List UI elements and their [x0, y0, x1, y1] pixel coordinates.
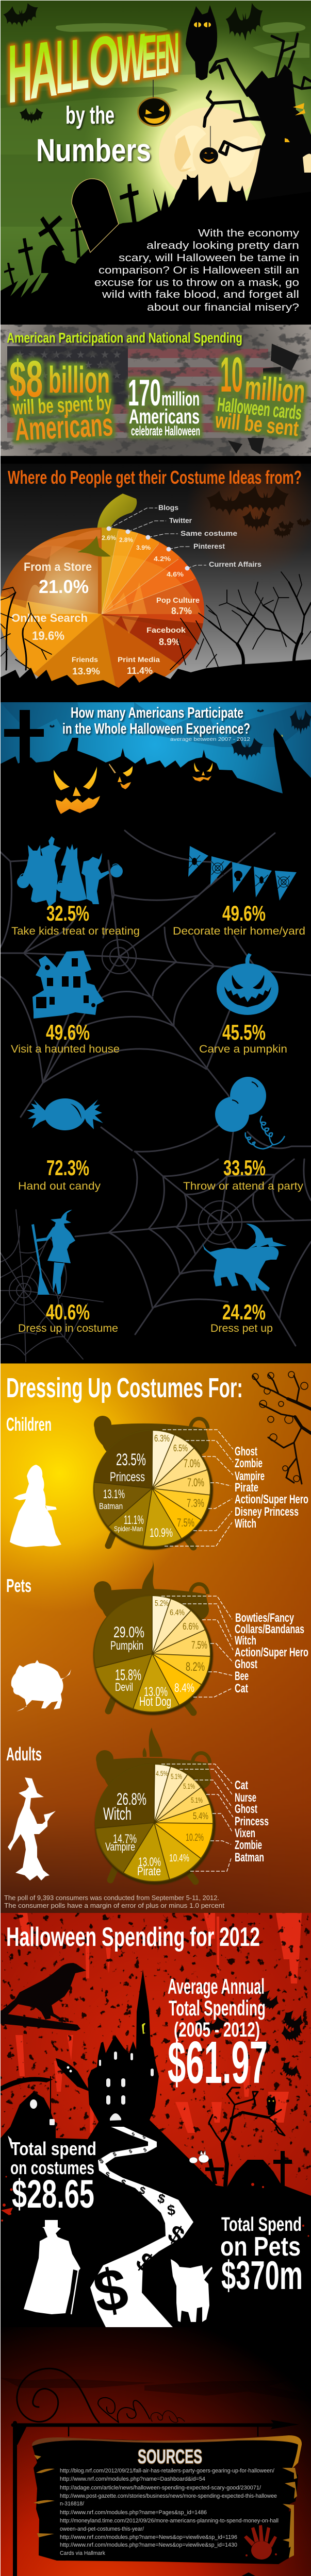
illustration: web one: [0, 831, 311, 1151]
text block: intro: excuse for us to throw on a mask, go: [94, 277, 299, 289]
icon: money road: $: [98, 2157, 105, 2165]
panel: sources scroll: [32, 2435, 302, 2564]
value: 72.3%: [46, 1156, 89, 1180]
heading: Halloween: E: [156, 22, 167, 89]
slice values: 2.6%: [102, 534, 116, 541]
outer labels: Blogs: [158, 503, 178, 512]
leaders: children: [162, 1430, 233, 1546]
chart values: pets: 13.0%: [144, 1685, 168, 1699]
text block: intro: With the economy: [198, 228, 299, 239]
text block: total spend on costumes: [10, 2138, 96, 2216]
slice values: 21.0%: [39, 576, 89, 597]
icon: pumpkin dog silhouette: [11, 1660, 71, 1711]
text block: source links: http://www.nrf.com/modules.php?name=Pages&sp_id=1486: [60, 2510, 207, 2516]
leaders: [109, 508, 206, 568]
text block: source links: [60, 2468, 279, 2556]
activity: haunted house: [11, 951, 120, 1055]
slice values: 3.9%: [136, 544, 151, 551]
panel: costume ideas: [1, 464, 311, 702]
illustration: hill: [0, 710, 311, 809]
value: 49.6%: [222, 901, 266, 925]
icon: sign arrow head: [271, 2420, 299, 2429]
icon: tree pumpkin faces: [285, 103, 311, 173]
chart values: pets: Hot Dog: [139, 1694, 171, 1709]
icon: money road: $: [156, 2191, 167, 2207]
text block: source links: http://adage.com/article/news/halloween-spending-expected-scary-good/230071/: [60, 2485, 261, 2491]
activity: hand out candy: [18, 1098, 103, 1192]
legend: children: [235, 1445, 308, 1531]
slice values: 8.7%: [171, 606, 192, 616]
chart values: adults: 5.1%: [191, 1796, 203, 1805]
value: 24.2%: [222, 1300, 266, 1324]
panel: hero: [0, 1, 311, 326]
chart values: children: 23.5%: [116, 1450, 146, 1469]
chart values: children: Princess: [110, 1470, 145, 1484]
chart values: children: 10.9%: [150, 1526, 173, 1540]
activity: carve pumpkin: [199, 953, 287, 1055]
heading: Numbers: Numbers: [36, 133, 151, 168]
heading: Halloween: L: [71, 23, 89, 106]
legend: children: Pirate: [235, 1481, 258, 1495]
activity: costume: [18, 1210, 118, 1334]
chart values: pets: 6.6%: [183, 1621, 199, 1632]
chart values: adults: 10.4%: [169, 1853, 189, 1864]
chart: pumpkin pie: [1, 494, 261, 688]
stat: 170 million: [128, 372, 200, 438]
heading: Halloween: [8, 20, 179, 121]
legend: adults: [235, 1778, 269, 1865]
icon: dog in witch hat: [201, 1224, 287, 1292]
group: adults: [6, 1727, 269, 1885]
icon: ghost: [56, 2058, 90, 2092]
illustration: twisted tree: [252, 1371, 311, 1484]
legend: pets: [235, 1611, 308, 1696]
caption: average between 2007 - 2012: [170, 736, 250, 742]
outer labels: [158, 503, 261, 568]
icon: money road: $: [167, 2202, 176, 2218]
chart values: pets: 6.4%: [170, 1608, 185, 1617]
icon: money road: $: [143, 2147, 148, 2154]
label: Dress up in costume: [18, 1323, 118, 1334]
legend: children: Zombie: [235, 1456, 263, 1470]
text block: total spend on pets: [220, 2214, 303, 2298]
subheading: Adults: [6, 1743, 42, 1765]
icon: money road: $: [138, 2185, 146, 2197]
chart values: children: 6.5%: [173, 1443, 188, 1453]
value: 32.5%: [46, 901, 89, 925]
stat: 170 million: million: [161, 388, 200, 410]
chart values: pets: Pumpkin: [110, 1639, 143, 1653]
chart: children cauldron pie: [93, 1416, 213, 1550]
text block: intro: already looking pretty darn: [146, 240, 299, 251]
chart: pets cauldron pie: [93, 1558, 213, 1715]
chart values: adults: 5.1%: [183, 1782, 195, 1791]
icon: bats: [50, 709, 311, 760]
legend: adults: Princess: [235, 1815, 269, 1828]
label: Visit a haunted house: [11, 1043, 120, 1055]
stat: 8 billion: will be spent by: [12, 392, 112, 419]
stat: 170 million: Americans: [129, 405, 200, 428]
value: 33.5%: [223, 1156, 266, 1180]
illustration: brown bats: [206, 486, 311, 538]
chart values: children: [99, 1433, 204, 1540]
chart values: children: 7.0%: [184, 1457, 200, 1470]
text block: intro: [94, 228, 299, 313]
text block: intro: about our financial misery?: [147, 302, 299, 313]
heading: Halloween: H: [8, 25, 32, 121]
text block: intro: comparison? Or is Halloween still an: [99, 265, 299, 276]
text block: intro: scary, will Halloween be tame in: [119, 252, 299, 264]
icon: money road: $: [112, 2151, 118, 2158]
legend: pets: Ghost: [235, 1657, 257, 1671]
chart values: pets: [110, 1599, 207, 1709]
chart values: adults: 4.5%: [156, 1769, 168, 1777]
text block: source links: http://www.nrf.com/modules.php?name=Dashboard&id=54: [60, 2476, 205, 2482]
icon: dracula silhouette: [24, 2220, 80, 2314]
moon: [159, 107, 264, 202]
icon: balloons: [215, 1077, 285, 1149]
text block: poll note: The consumer polls have a margin of error of plus or minus 1.0 percent: [4, 1902, 225, 1909]
chart values: children: 7.0%: [187, 1476, 204, 1489]
icon: jack-o-lantern: [155, 2572, 311, 2576]
slice values: Friends: [72, 655, 98, 664]
icon: witch silhouette: [8, 1777, 56, 1880]
chart values: pets: Devil: [115, 1681, 133, 1693]
label: Decorate their home/yard: [173, 925, 305, 937]
illustration: flag: ★ ★ ★ ★ ★ ★ ★ ★ ★: [15, 370, 122, 381]
heading: by the: by the: [66, 102, 114, 129]
activity: decorate: [173, 846, 305, 937]
slice values: 8.9%: [159, 637, 180, 647]
outer labels: Same costume: [181, 529, 237, 537]
legend: pets: Bee: [235, 1669, 249, 1683]
icon: owl: [186, 5, 217, 80]
icon: hanging pumpkin: [137, 80, 171, 127]
panel: hero: N: [165, 21, 179, 86]
chart values: pets: 8.4%: [174, 1681, 194, 1695]
subheading: Children: [6, 1414, 52, 1435]
icon: pumpkin stem: [97, 494, 137, 533]
legend: children: Vampire: [235, 1469, 265, 1483]
stat: 8 billion: [9, 350, 114, 448]
icon: money road: $: [128, 2148, 134, 2155]
icon: witch: [31, 1210, 75, 1295]
chart values: pets: 7.5%: [191, 1639, 207, 1651]
icon: jack-o-lanterns: [54, 762, 212, 814]
illustration: bare trees and ground: [0, 572, 311, 703]
illustration: flag: ★ ★ ★ ★ ★ ★ ★ ★ ★: [15, 349, 122, 361]
icon: reaper: [8, 2099, 55, 2148]
chart values: adults: 14.7%: [113, 1832, 137, 1846]
icon: princess silhouette: [10, 1465, 61, 1547]
chart values: pets: 8.2%: [186, 1660, 205, 1674]
illustration: web three: [0, 1210, 103, 1362]
icon: bat top right: [225, 1, 264, 45]
icon: crow: [0, 1963, 86, 2031]
heading: How many Americans Participate: [71, 705, 243, 721]
icon: money road: $: [163, 2220, 189, 2250]
panel: halloween spending: [0, 1913, 311, 2328]
slice values: 2.8%: [119, 536, 133, 544]
outer labels: Pinterest: [193, 542, 225, 550]
outer labels: Current Affairs: [209, 560, 261, 568]
label: Carve a pumpkin: [199, 1043, 287, 1055]
legend: children: Witch: [235, 1517, 256, 1531]
icon: kids: [17, 836, 123, 907]
icon: money road: $: [131, 2131, 135, 2137]
heading: Halloween: W: [117, 20, 145, 97]
chart values: adults: Witch: [103, 1804, 132, 1824]
stat: 170 million: celebrate Halloween: [131, 423, 200, 438]
leaders: adults: [161, 1764, 233, 1871]
leaders: pets: [161, 1596, 233, 1697]
illustration: flag: ★ ★ ★ ★ ★ ★ ★ ★: [23, 360, 117, 371]
value: 49.6%: [46, 1020, 90, 1044]
legend: pets: Cat: [235, 1682, 248, 1696]
chart values: children: 13.1%: [103, 1487, 125, 1501]
slice values: 19.6%: [32, 629, 64, 643]
subheading: Pets: [6, 1575, 31, 1596]
heading: Halloween: E: [142, 22, 157, 92]
text block: source links: oween-and-pet-costumes-this-year/: [60, 2526, 144, 2532]
value: $28.65: [12, 2172, 94, 2216]
slice values: 11.4%: [127, 666, 153, 676]
illustration: cats: [174, 174, 247, 204]
text block: poll note: [4, 1894, 225, 1909]
chart values: adults: [103, 1769, 208, 1878]
group: pets: [6, 1558, 308, 1715]
stat: 8 billion: billion: [48, 360, 110, 401]
chart values: children: 7.3%: [187, 1497, 204, 1510]
illustration: graveyard ground: [0, 175, 311, 326]
icon: money road: $: [142, 2134, 146, 2140]
illustration: hillside: [0, 2076, 311, 2328]
chart values: pets: 29.0%: [113, 1624, 144, 1641]
icon: money road: $: [120, 2178, 127, 2188]
icon: money road: $: [89, 2255, 133, 2326]
legend: adults: Batman: [235, 1851, 264, 1865]
icon: bat top left: [3, 1, 40, 31]
legend: adults: Zombie: [235, 1838, 262, 1852]
chart values: children: 11.1%: [124, 1513, 144, 1527]
illustration: sign bracket and scrolls: [13, 2368, 276, 2576]
icon: dog silhouette: [171, 2259, 212, 2322]
text block: total spend on costumes: Total spend: [11, 2138, 96, 2159]
icon: small white sheep: [189, 2150, 209, 2163]
text block: poll note: The poll of 9,393 consumers was conducted from September 5-11, 2012.: [4, 1894, 219, 1902]
label: Dress pet up: [210, 1323, 273, 1334]
legend: adults: Cat: [235, 1778, 248, 1792]
text block: source links: http://www.post-gazette.com/stories/business/news/more-spending-expected-this-hallowee: [60, 2493, 277, 2499]
chart values: children: Batman: [99, 1501, 123, 1511]
chart values: adults: 5.4%: [193, 1811, 208, 1821]
legend: pets: Witch: [235, 1634, 256, 1648]
chart: adults cauldron pie: [95, 1727, 216, 1885]
activity: dress pet: [201, 1224, 287, 1334]
chart values: adults: 13.0%: [138, 1855, 161, 1869]
stat: 170 million: 170: [128, 372, 161, 414]
icon: candy: [27, 1098, 103, 1130]
icon: small hanging pumpkin: [200, 147, 218, 164]
icon: pumpkin leaf: [77, 536, 111, 556]
icon: bunting: [188, 846, 297, 901]
chart values: adults: Pirate: [137, 1865, 161, 1878]
text block: average annual: [168, 1974, 268, 2096]
icon: money road: $: [130, 2247, 160, 2278]
icon: money road: $: [104, 2170, 111, 2180]
text block: source links: n-316818/: [60, 2501, 85, 2507]
icon: money road: [89, 2127, 193, 2327]
text block: source links: http://www.nrf.com/modules.php?name=News&op=viewlive&sp_id=1196: [60, 2534, 237, 2540]
text block: source links: http://blog.nrf.com/2012/09/21/fall-air-has-retailers-party-goers-gearing-up-for-halloween/: [60, 2468, 275, 2474]
heading: [62, 705, 250, 737]
value: 45.5%: [222, 1020, 266, 1044]
chart values: children: Spider-Man: [114, 1524, 143, 1533]
legend: adults: Ghost: [235, 1802, 257, 1816]
chart values: pets: 15.8%: [115, 1667, 141, 1684]
heading: Halloween: A: [30, 23, 58, 116]
heading: sources: SOURCES: [138, 2446, 202, 2468]
illustration: web two: [75, 1149, 311, 1346]
slice values: 4.2%: [154, 555, 171, 563]
slice values: 4.6%: [167, 570, 184, 578]
text block: source links: http://www.nrf.com/modules.php?name=News&op=viewlive&sp_id=1430: [60, 2542, 237, 2548]
chart values: children: 7.5%: [177, 1516, 194, 1529]
label: Take kids treat or treating: [11, 925, 140, 937]
chart values: pets: 5.2%: [155, 1599, 169, 1608]
heading: Halloween: L: [56, 22, 72, 110]
legend: children: Ghost: [235, 1445, 257, 1459]
illustration: dead tree: [204, 34, 311, 216]
slice values: Facebook: [146, 626, 186, 635]
text block: source links: Cards via Hallmark: [60, 2550, 105, 2556]
panel: dressing up costumes: [1, 1363, 311, 1913]
chart values: adults: Vampire: [105, 1840, 135, 1853]
slice values: From a Store: [24, 560, 92, 573]
panel: sources and credits: [0, 2327, 311, 2576]
icon: bat middle left: [20, 108, 43, 124]
chart values: adults: 10.2%: [186, 1832, 204, 1843]
illustration: flag: [7, 346, 279, 438]
icon: haunted house: [32, 951, 104, 1019]
text block: average annual: (2005 - 2012): [174, 2019, 260, 2041]
text block: intro: wild with fake blood, and forget all: [102, 289, 299, 300]
panel: how many americans: [0, 702, 311, 1364]
stat: 8 billion: $8: [9, 350, 43, 408]
stat: 8 billion: Americans: [14, 407, 114, 448]
illustration: splatter: [1, 2176, 309, 2237]
heading: Halloween: O: [89, 20, 119, 101]
slice values: Online Search: [11, 612, 88, 624]
activity: party: [183, 1077, 304, 1192]
slice values: [11, 534, 200, 676]
group: children: [6, 1414, 308, 1550]
icon: bloody handprint: [244, 2525, 277, 2560]
panel: american participation: [1, 325, 311, 456]
chart values: adults: 5.1%: [171, 1772, 182, 1781]
label: Hand out candy: [18, 1180, 101, 1192]
stat: 10 million: 10: [220, 347, 243, 402]
chart values: adults: 26.8%: [117, 1790, 146, 1808]
slice values: Print Media: [118, 655, 160, 664]
chart values: children: 6.3%: [154, 1433, 170, 1444]
illustration: dead tree and graves: [189, 2088, 292, 2190]
text block: source links: http://moneyland.time.com/2012/09/26/more-americans-planning-to-spend-money-on-hall: [60, 2518, 279, 2524]
outer labels: Twitter: [169, 516, 192, 524]
legend: adults: Nurse: [235, 1791, 256, 1805]
text block: total spend on costumes: on costumes: [10, 2157, 94, 2178]
legend: adults: Vixen: [235, 1826, 255, 1840]
illustration: castle: [88, 1970, 159, 2126]
value: 40.6%: [46, 1300, 90, 1324]
icon: bats with dollars: [195, 1987, 306, 2081]
label: Throw or attend a party: [183, 1180, 304, 1192]
slice values: Pop Culture: [156, 596, 200, 605]
stat: 10 million: [214, 347, 306, 440]
icon: wolf eye: [282, 734, 283, 737]
activity: trick or treat: [11, 836, 140, 937]
icon: pumpkin: [217, 953, 279, 1015]
slice values: 13.9%: [72, 666, 100, 676]
icon: owl in tree: [267, 2096, 276, 2115]
